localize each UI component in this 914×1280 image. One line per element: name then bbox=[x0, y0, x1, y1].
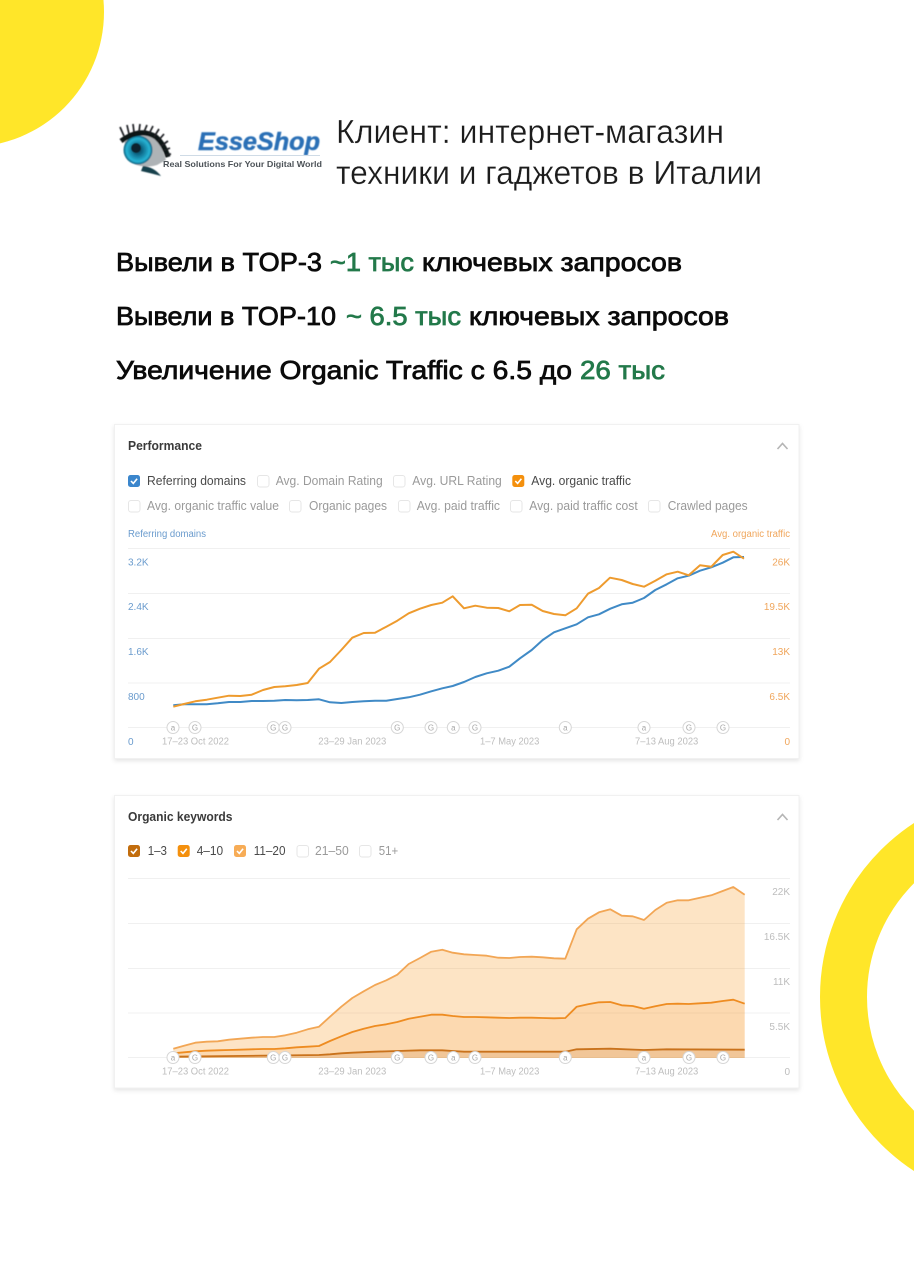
line chart: referring domains and organic traffic: G bbox=[472, 724, 478, 732]
line chart: referring domains and organic traffic: 6.5K bbox=[769, 692, 790, 703]
result line: TOP-3: ключевых запросов bbox=[422, 247, 682, 277]
legend: keyword position ranges: 21–50 bbox=[315, 844, 349, 858]
area chart: organic keywords: G bbox=[192, 1054, 198, 1062]
logo: EsseShop bbox=[120, 124, 322, 176]
line chart: referring domains and organic traffic: 23–29 Jan 2023 bbox=[318, 736, 387, 748]
icon: collapse chevron bbox=[778, 444, 788, 449]
area: positions 11–20 bbox=[173, 887, 745, 1058]
line chart: referring domains and organic traffic: G bbox=[394, 724, 400, 732]
result line: TOP-10: ~ 6.5 тыс bbox=[346, 301, 461, 331]
logo tagline: Real Solutions For Your Digital World bbox=[163, 159, 322, 169]
legend: keyword position ranges: 1–3 bbox=[148, 844, 167, 858]
result line: TOP-10 bbox=[116, 301, 729, 331]
line chart: referring domains and organic traffic: 13K bbox=[772, 647, 790, 658]
area chart: organic keywords: G bbox=[428, 1054, 434, 1062]
legend: performance metrics: Avg. organic traffic bbox=[531, 474, 631, 488]
area chart: organic keywords: 7–13 Aug 2023 bbox=[635, 1066, 699, 1078]
panel: performance bbox=[114, 424, 799, 758]
decorative yellow circle top-left bbox=[0, 0, 104, 147]
event markers bbox=[167, 1052, 729, 1064]
line chart: referring domains and organic traffic: a bbox=[642, 724, 647, 732]
line chart: referring domains and organic traffic: Referring domains bbox=[128, 529, 206, 540]
line chart: referring domains and organic traffic: 1.6K bbox=[128, 647, 149, 658]
area chart: organic keywords: 0 bbox=[784, 1067, 790, 1078]
area chart: organic keywords: 11K bbox=[773, 977, 790, 988]
legend: performance metrics: Crawled pages bbox=[668, 499, 748, 513]
line chart: referring domains and organic traffic: 800 bbox=[128, 692, 145, 703]
line: referring domains bbox=[173, 557, 744, 705]
line chart: referring domains and organic traffic: 2.4K bbox=[128, 602, 149, 613]
area chart: organic keywords: a bbox=[563, 1054, 568, 1062]
result line: TOP-10: Вывели в TOP-10 bbox=[116, 301, 336, 331]
result line: TOP-10: ключевых запросов bbox=[469, 301, 729, 331]
line chart: referring domains and organic traffic: G bbox=[686, 724, 692, 732]
area chart: organic keywords: G bbox=[472, 1054, 478, 1062]
legend: performance metrics: Avg. paid traffic bbox=[417, 499, 500, 513]
area chart: organic keywords: 17–23 Oct 2022 bbox=[162, 1066, 229, 1078]
title: client description bbox=[336, 113, 762, 191]
area chart: organic keywords bbox=[128, 878, 790, 1078]
decorative yellow ring right bbox=[844, 812, 914, 1182]
icon: eye bbox=[120, 124, 171, 176]
line chart: referring domains and organic traffic: 26K bbox=[772, 558, 790, 568]
legend: performance metrics: Avg. URL Rating bbox=[412, 474, 502, 488]
line chart: referring domains and organic traffic: 0 bbox=[784, 737, 790, 748]
legend: performance metrics bbox=[128, 474, 748, 513]
title: client description: Клиент: интернет-магазин bbox=[336, 113, 724, 150]
line chart: referring domains and organic traffic: a bbox=[563, 724, 568, 732]
legend: keyword position ranges: 11–20 bbox=[254, 844, 286, 858]
area chart: organic keywords: a bbox=[451, 1054, 456, 1062]
line chart: referring domains and organic traffic: 7–13 Aug 2023 bbox=[635, 736, 699, 748]
area: positions 4–10 bbox=[173, 1000, 745, 1058]
line: positions 11–20 bbox=[173, 887, 745, 1049]
area chart: organic keywords: a bbox=[171, 1054, 176, 1062]
line: positions 4–10 bbox=[173, 1000, 745, 1053]
area chart: organic keywords: G bbox=[282, 1054, 288, 1062]
heading: performance: Performance bbox=[128, 439, 202, 453]
result line: organic traffic: 26 тыс bbox=[580, 355, 665, 385]
area chart: organic keywords: 22K bbox=[772, 887, 790, 898]
area chart: organic keywords: 23–29 Jan 2023 bbox=[318, 1066, 387, 1078]
result line: organic traffic: Увеличение Organic Traffic с 6.5 до bbox=[116, 355, 572, 385]
line chart: referring domains and organic traffic: 0 bbox=[128, 737, 134, 748]
area chart: organic keywords: G bbox=[720, 1054, 726, 1062]
result line: TOP-3: ~1 тыс bbox=[330, 247, 414, 277]
line: positions 1–3 bbox=[173, 1049, 745, 1057]
legend: performance metrics: Avg. organic traffic value bbox=[147, 499, 279, 513]
legend: performance metrics: Avg. Domain Rating bbox=[276, 474, 383, 488]
line chart: referring domains and organic traffic: G bbox=[428, 724, 434, 732]
area chart: organic keywords: G bbox=[686, 1054, 692, 1062]
legend: keyword position ranges: 51+ bbox=[379, 844, 398, 858]
line chart: referring domains and organic traffic: 17–23 Oct 2022 bbox=[162, 736, 229, 748]
area chart: organic keywords: a bbox=[642, 1054, 647, 1062]
line chart: referring domains and organic traffic: 3.2K bbox=[128, 558, 149, 568]
line chart: referring domains and organic traffic bbox=[128, 529, 790, 748]
legend: performance metrics: Referring domains bbox=[147, 474, 246, 488]
legend: performance metrics: Avg. paid traffic cost bbox=[529, 499, 638, 513]
panel: organic keywords bbox=[114, 796, 799, 1088]
line chart: referring domains and organic traffic: 19.5K bbox=[764, 602, 790, 613]
logo wordmark: EsseShop bbox=[198, 128, 320, 156]
legend: performance metrics: Organic pages bbox=[309, 499, 387, 513]
area chart: organic keywords: 5.5K bbox=[769, 1022, 790, 1033]
area chart: organic keywords: G bbox=[270, 1054, 276, 1062]
line chart: referring domains and organic traffic: G bbox=[192, 724, 198, 732]
legend: keyword position ranges bbox=[128, 844, 398, 858]
icon: collapse chevron bbox=[778, 814, 788, 820]
title: client description: техники и гаджетов в Италии bbox=[336, 154, 762, 191]
area: positions 1–3 bbox=[173, 1049, 745, 1058]
area chart: organic keywords: 16.5K bbox=[764, 932, 790, 943]
event markers bbox=[167, 722, 729, 734]
line chart: referring domains and organic traffic: Avg. organic traffic bbox=[711, 529, 790, 540]
line chart: referring domains and organic traffic: G bbox=[282, 724, 288, 732]
area chart: organic keywords: 1–7 May 2023 bbox=[480, 1066, 540, 1078]
line chart: referring domains and organic traffic: G bbox=[720, 724, 726, 732]
line chart: referring domains and organic traffic: 1–7 May 2023 bbox=[480, 736, 540, 748]
heading: organic keywords: Organic keywords bbox=[128, 810, 233, 824]
result line: TOP-3 bbox=[116, 247, 682, 277]
line chart: referring domains and organic traffic: G bbox=[270, 724, 276, 732]
result line: TOP-3: Вывели в TOP-3 bbox=[116, 247, 322, 277]
area chart: organic keywords: G bbox=[394, 1054, 400, 1062]
line: organic traffic bbox=[173, 552, 744, 707]
legend: keyword position ranges: 4–10 bbox=[197, 844, 223, 858]
line chart: referring domains and organic traffic: a bbox=[171, 724, 176, 732]
line chart: referring domains and organic traffic: a bbox=[451, 724, 456, 732]
